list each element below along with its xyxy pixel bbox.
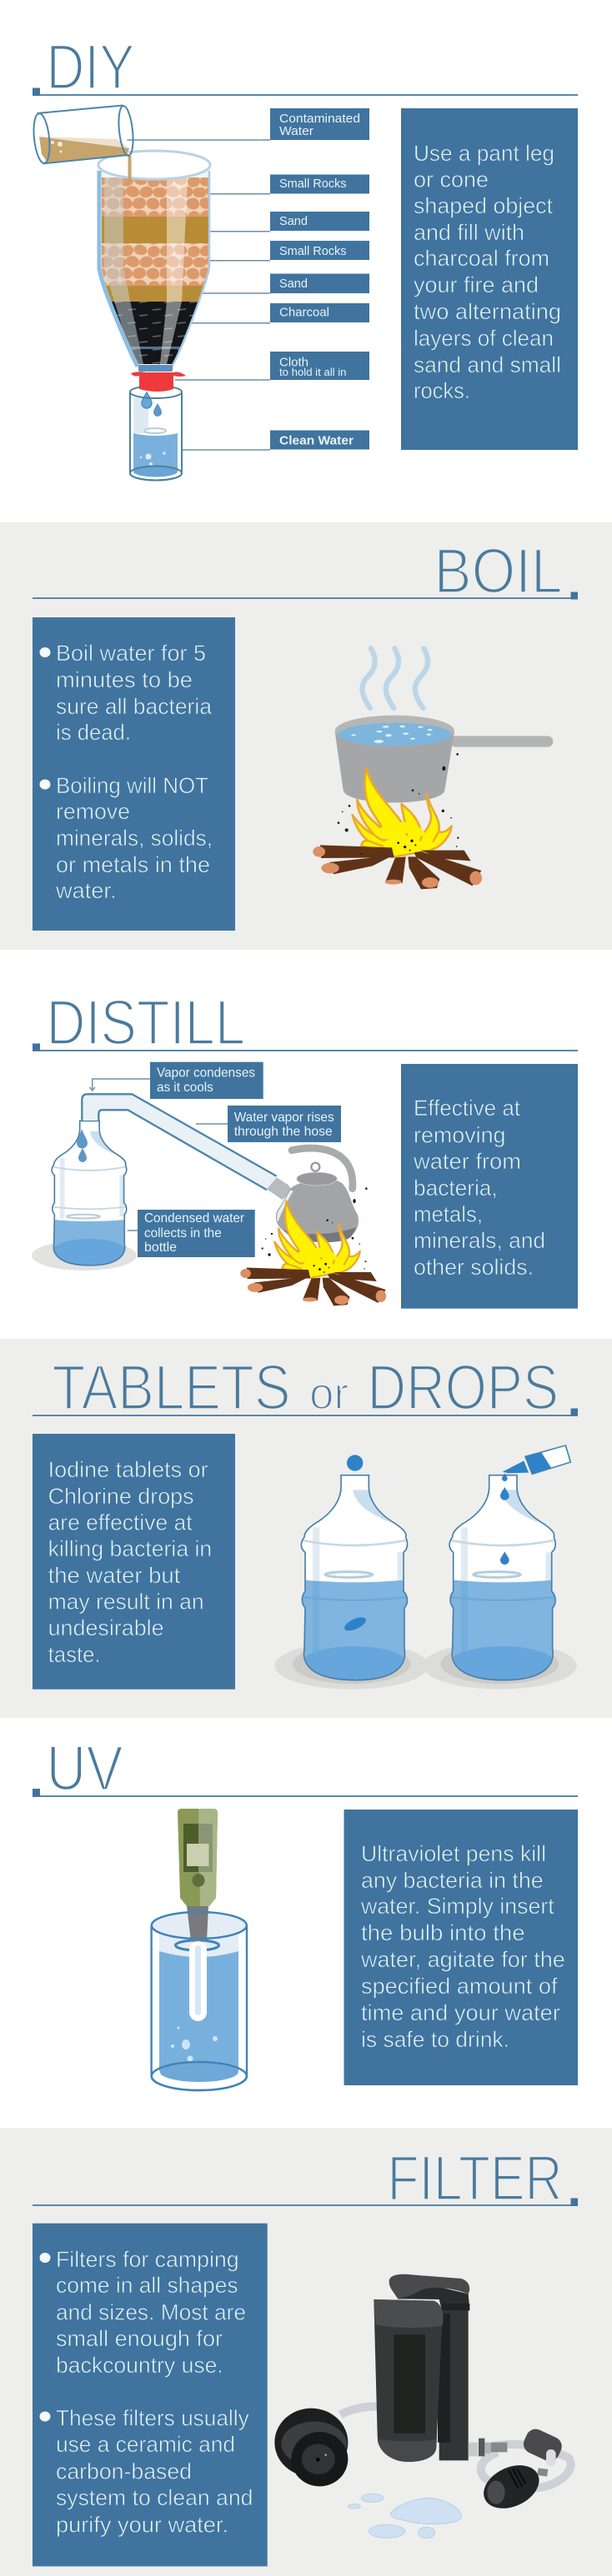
label: charcoal — [270, 303, 369, 322]
label: condensed water — [138, 1210, 255, 1257]
heading: TABLETS or DROPS — [33, 1353, 578, 1423]
panel: UV text: specified amount of — [361, 1974, 558, 1999]
heading: TABLETS or DROPS: or — [309, 1369, 349, 1419]
heading: UV — [33, 1733, 578, 1805]
panel: tablets text: undesirable — [48, 1615, 164, 1640]
panel: DIY text: Use a pant leg — [414, 141, 554, 166]
panel: boil text: Boil water for 5 — [56, 641, 206, 666]
hose — [82, 1094, 277, 1190]
heading: DISTILL: DISTILL — [47, 988, 245, 1058]
heading: BOIL: BOIL — [434, 537, 562, 607]
jug with drops — [423, 1445, 577, 1690]
panel: DIY text: two alternating — [414, 299, 561, 324]
panel: distill text: bacteria, — [414, 1176, 498, 1201]
illustration: DIY bottle filter — [32, 105, 369, 480]
heading: FILTER — [33, 2143, 578, 2214]
heading: UV: UV — [47, 1733, 123, 1805]
heading: BOIL — [33, 537, 578, 607]
panel: UV text: is safe to drink. — [361, 2027, 509, 2052]
steam — [362, 648, 428, 708]
label: water vapor rises — [228, 1106, 341, 1142]
heading: DIY — [33, 32, 578, 103]
label: condensed water: collects in the — [144, 1226, 222, 1241]
jug with tablet — [274, 1455, 429, 1690]
panel: boil text: water. — [55, 878, 117, 903]
panel: UV text: the bulb into the — [361, 1920, 525, 1945]
heading: DIY: DIY — [47, 32, 135, 103]
label: sand 2: Sand — [279, 277, 308, 291]
panel: distill text: removing — [414, 1123, 505, 1148]
glass — [152, 1912, 247, 2090]
panel: distill text: minerals, and — [414, 1228, 545, 1253]
section: DIY — [33, 46, 578, 482]
panel: filter text: purify your water. — [56, 2513, 228, 2538]
campfire — [240, 1201, 386, 1305]
kettle — [267, 1148, 368, 1242]
panel: filter text: system to clean and — [56, 2485, 253, 2510]
panel: filter text: These filters usually — [56, 2406, 249, 2431]
label: sand 2 — [270, 273, 369, 293]
red cap and cloth — [131, 365, 186, 392]
hoses — [340, 2406, 571, 2489]
pre-filter — [274, 2409, 348, 2486]
label: condensed water: Condensed water — [144, 1211, 245, 1226]
collection jar — [130, 386, 182, 480]
panel: tablets text — [33, 1434, 235, 1690]
label: small rocks — [270, 175, 369, 193]
panel: UV text: Ultraviolet pens kill — [361, 1841, 546, 1866]
collection jug — [51, 1121, 128, 1267]
label: clean water — [270, 430, 369, 450]
panel: tablets text: are effective at — [48, 1510, 193, 1535]
panel: filter text: carbon-based — [56, 2459, 192, 2484]
heading: TABLETS or DROPS: TABLETS — [52, 1353, 290, 1423]
panel: UV text: time and your water — [361, 2000, 560, 2025]
panel: UV text: water, agitate for the — [360, 1947, 565, 1972]
section: DISTILL — [32, 1001, 578, 1309]
label: cloth: Cloth — [279, 355, 309, 370]
panel: tablets text: Chlorine drops — [48, 1484, 194, 1509]
label: small rocks 2: Small Rocks — [279, 244, 347, 258]
label: water vapor rises: through the hose — [234, 1125, 333, 1139]
label: contaminated water: Contaminated — [279, 112, 360, 126]
illustration: distillation setup — [32, 1062, 386, 1305]
label: cloth — [270, 352, 369, 380]
label: sand — [270, 212, 369, 231]
panel: UV text — [344, 1810, 578, 2085]
water puddles — [349, 2494, 461, 2539]
panel: DIY text: sand and small — [414, 352, 561, 377]
label: small rocks 2 — [270, 241, 369, 260]
drops in neck — [77, 1129, 88, 1162]
panel: tablets text: Iodine tablets or — [48, 1457, 208, 1482]
panel: filter text: use a ceramic and — [56, 2432, 235, 2457]
panel: distill text: metals, — [414, 1202, 483, 1227]
label: water vapor rises: Water vapor rises — [234, 1111, 334, 1125]
label: sand: Sand — [279, 214, 308, 228]
heading: FILTER: FILTER — [387, 2143, 562, 2214]
panel: distill text — [401, 1064, 578, 1309]
pot — [335, 716, 553, 802]
heading: TABLETS or DROPS: DROPS — [367, 1353, 559, 1423]
panel: filter text: come in all shapes — [56, 2273, 238, 2298]
illustration: water jugs — [274, 1445, 577, 1690]
label: clean water: Clean Water — [279, 433, 354, 448]
panel: tablets text: may result in an — [48, 1590, 204, 1615]
label: small rocks: Small Rocks — [279, 177, 347, 191]
panel: DIY text: layers of clean — [414, 326, 554, 351]
illustration: UV pen in glass — [152, 1809, 247, 2090]
pouring glass — [32, 105, 135, 182]
campfire — [313, 768, 482, 889]
panel: boil text: minutes to be — [56, 667, 193, 692]
panel: tablets text: taste. — [48, 1642, 101, 1667]
panel: filter text — [33, 2224, 268, 2566]
panel: boil text: remove — [56, 799, 130, 824]
panel: distill text: other solids. — [414, 1255, 534, 1280]
section: TABLETS or DROPS — [0, 1339, 612, 1718]
panel: DIY text: and fill with — [414, 220, 524, 245]
label: cloth: to hold it all in — [279, 366, 347, 378]
panel: DIY text: rocks. — [414, 378, 470, 403]
panel: DIY text: charcoal from — [414, 246, 549, 271]
label: contaminated water — [270, 108, 369, 140]
glass outline — [152, 1912, 247, 2090]
panel: DIY text — [401, 108, 578, 450]
panel: filter text: backcountry use. — [56, 2353, 223, 2378]
label: contaminated water: Water — [279, 124, 314, 138]
leader lines — [90, 1079, 228, 1231]
label: vapor condenses: Vapor condenses — [157, 1066, 255, 1081]
panel: boil text — [33, 617, 235, 931]
label: vapor condenses: as it cools — [157, 1081, 213, 1095]
section: BOIL — [0, 522, 612, 950]
connector and mouthpiece — [469, 2426, 565, 2517]
panel: boil text: or metals in the — [56, 852, 210, 877]
panel: UV text: water. Simply insert — [360, 1894, 554, 1919]
panel: tablets text: killing bacteria in — [48, 1536, 212, 1561]
filter body — [374, 2274, 469, 2462]
panel: filter text: Filters for camping — [56, 2247, 239, 2272]
panel: boil text: minerals, solids, — [56, 826, 213, 851]
panel: filter text: small enough for — [56, 2326, 223, 2351]
panel: filter text: and sizes. Most are — [56, 2300, 246, 2325]
panel: DIY text: shaped object — [414, 193, 554, 218]
panel: boil text: is dead. — [56, 720, 131, 745]
leader lines — [125, 140, 270, 450]
panel: distill text: Effective at — [414, 1096, 521, 1121]
label: vapor condenses — [150, 1062, 263, 1099]
panel: UV text: any bacteria in the — [361, 1868, 544, 1893]
panel: tablets text: the water but — [48, 1563, 181, 1588]
illustration: pot over campfire — [313, 648, 553, 889]
bottle with layers — [96, 151, 213, 367]
section: FILTER — [0, 2128, 612, 2576]
panel: DIY text: or cone — [414, 167, 489, 192]
UV pen — [178, 1809, 218, 2021]
panel: boil text: sure all bacteria — [56, 694, 212, 719]
section: UV — [0, 1718, 612, 2128]
panel: distill text: water from — [413, 1149, 521, 1174]
illustration: camping water filter — [274, 2274, 571, 2539]
bottle shadow — [32, 1241, 137, 1271]
panel: boil text: Boiling will NOT — [56, 773, 208, 798]
label: charcoal: Charcoal — [279, 305, 329, 320]
label: condensed water: bottle — [144, 1241, 177, 1255]
panel: DIY text: your fire and — [414, 272, 539, 297]
heading: DISTILL — [33, 988, 578, 1058]
